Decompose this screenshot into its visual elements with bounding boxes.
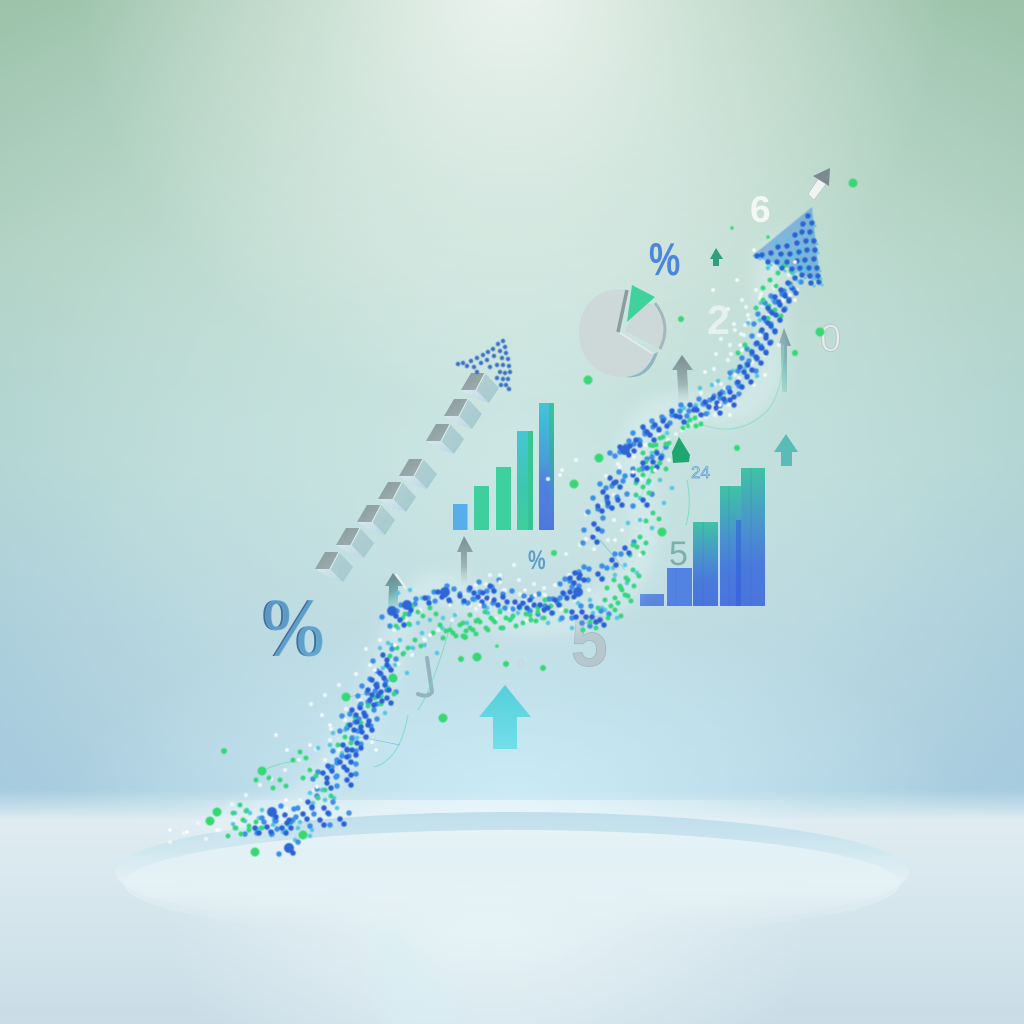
pie slice highlight	[627, 285, 655, 322]
particles: arrowhead highlights	[760, 219, 822, 286]
numeral 0: 0	[820, 318, 841, 360]
numeral 2: 2	[707, 297, 730, 343]
numeral 6: 6	[750, 189, 771, 230]
scattered green dots	[210, 183, 853, 852]
particles: pale cyan and cyan	[233, 240, 817, 840]
numeral 0 faint: 0	[517, 656, 524, 671]
numeral 5 large: 5	[571, 600, 608, 682]
icon: silver arrow top right	[808, 168, 830, 200]
particles: dark blue	[255, 288, 796, 853]
numeral 5 small: 5	[669, 535, 688, 573]
particles: mid blue	[245, 282, 801, 854]
percent sign: large: %	[263, 583, 325, 673]
icon: teal arrow right	[774, 434, 798, 466]
particles: large blue clumps	[272, 450, 625, 848]
icon: small green arrow	[710, 248, 723, 266]
large bar chart	[640, 468, 765, 606]
podium ring	[115, 812, 909, 938]
particles: white sparkle	[170, 250, 795, 832]
numeral 24 outline: 24	[691, 463, 710, 482]
particle ribbon: main rising trail	[170, 216, 822, 854]
icon: large cyan up arrow	[479, 685, 531, 749]
icon: particle arrowhead body	[752, 207, 820, 283]
floating cube staircase	[315, 373, 499, 582]
particles: pale white haze	[170, 275, 797, 842]
icon: grey-teal arrow right	[778, 328, 791, 392]
icon: pie chart	[579, 285, 665, 377]
icon: particle arrowhead above cubes	[458, 341, 510, 389]
particles: arrowhead dots	[757, 216, 819, 283]
percent sign: small: %	[528, 545, 546, 575]
particles: green	[228, 265, 791, 836]
icon: teal arrow left	[385, 573, 406, 610]
small bar chart	[453, 403, 554, 530]
percent sign: large: %	[261, 583, 323, 673]
particle ribbon haze	[215, 249, 795, 825]
thin connecting lines	[262, 345, 783, 771]
icon: grey arrow centre	[672, 355, 693, 406]
icon: silver hook	[418, 658, 432, 696]
icon: green arrow in ribbon	[672, 437, 690, 463]
floor	[0, 790, 1024, 1024]
icon: grey arrow under small chart	[457, 536, 473, 588]
percent sign: blue: %	[649, 233, 680, 285]
